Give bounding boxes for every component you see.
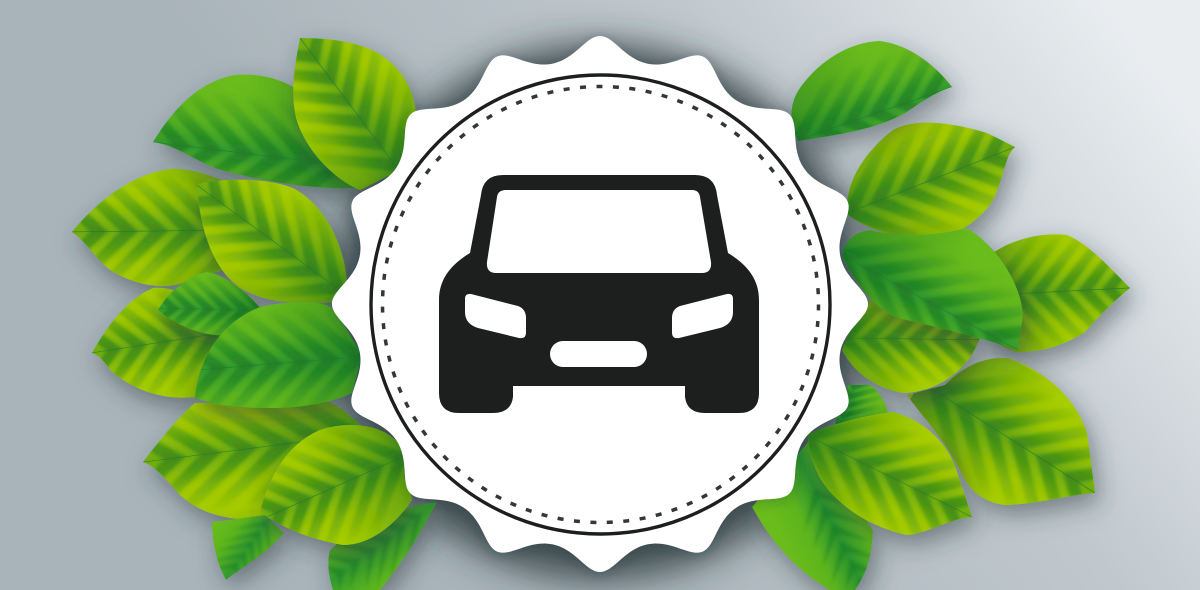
leaf: small hidden green: [835, 382, 904, 424]
leaf: middle right green: [842, 224, 1042, 370]
leaf: top-left green: [151, 70, 361, 212]
leaf: middle right olive: [842, 300, 993, 416]
badge cast shadow on background: [332, 44, 868, 580]
leaf: front lower lime: [254, 425, 425, 566]
badge: inner dashed ring: [382, 86, 818, 522]
leaf: small green: [154, 270, 268, 354]
leaf: top lime: [284, 34, 430, 206]
leaf: left lime: [69, 166, 235, 303]
leaf: lower-left lime: [88, 284, 220, 422]
car grille: [550, 341, 647, 367]
leaf: upper middle lime: [189, 177, 352, 308]
leaf: far right lime: [984, 228, 1144, 376]
car left headlight: [465, 294, 526, 338]
car windshield: [487, 190, 711, 273]
leaf: big middle green: [188, 298, 360, 433]
leaf: lower far right lime: [906, 356, 1114, 530]
leaf: upper right lime: [843, 116, 1030, 243]
leaf: bottom green: [305, 502, 437, 590]
car right headlight: [672, 294, 733, 338]
leaf: front lower right lime: [804, 408, 988, 560]
icon: car front view: [439, 175, 759, 413]
leaf: bottom right green: [752, 440, 891, 590]
right leaf cluster: [722, 0, 1191, 590]
leaf: top right green: [786, 36, 966, 162]
car body: [439, 175, 759, 413]
badge: scalloped white seal: [332, 36, 868, 572]
leaf: small lower green: [199, 515, 284, 590]
leaf: bottom-left lime: [140, 402, 364, 536]
left leaf cluster: [69, 34, 444, 590]
badge: outer solid ring: [371, 75, 830, 534]
